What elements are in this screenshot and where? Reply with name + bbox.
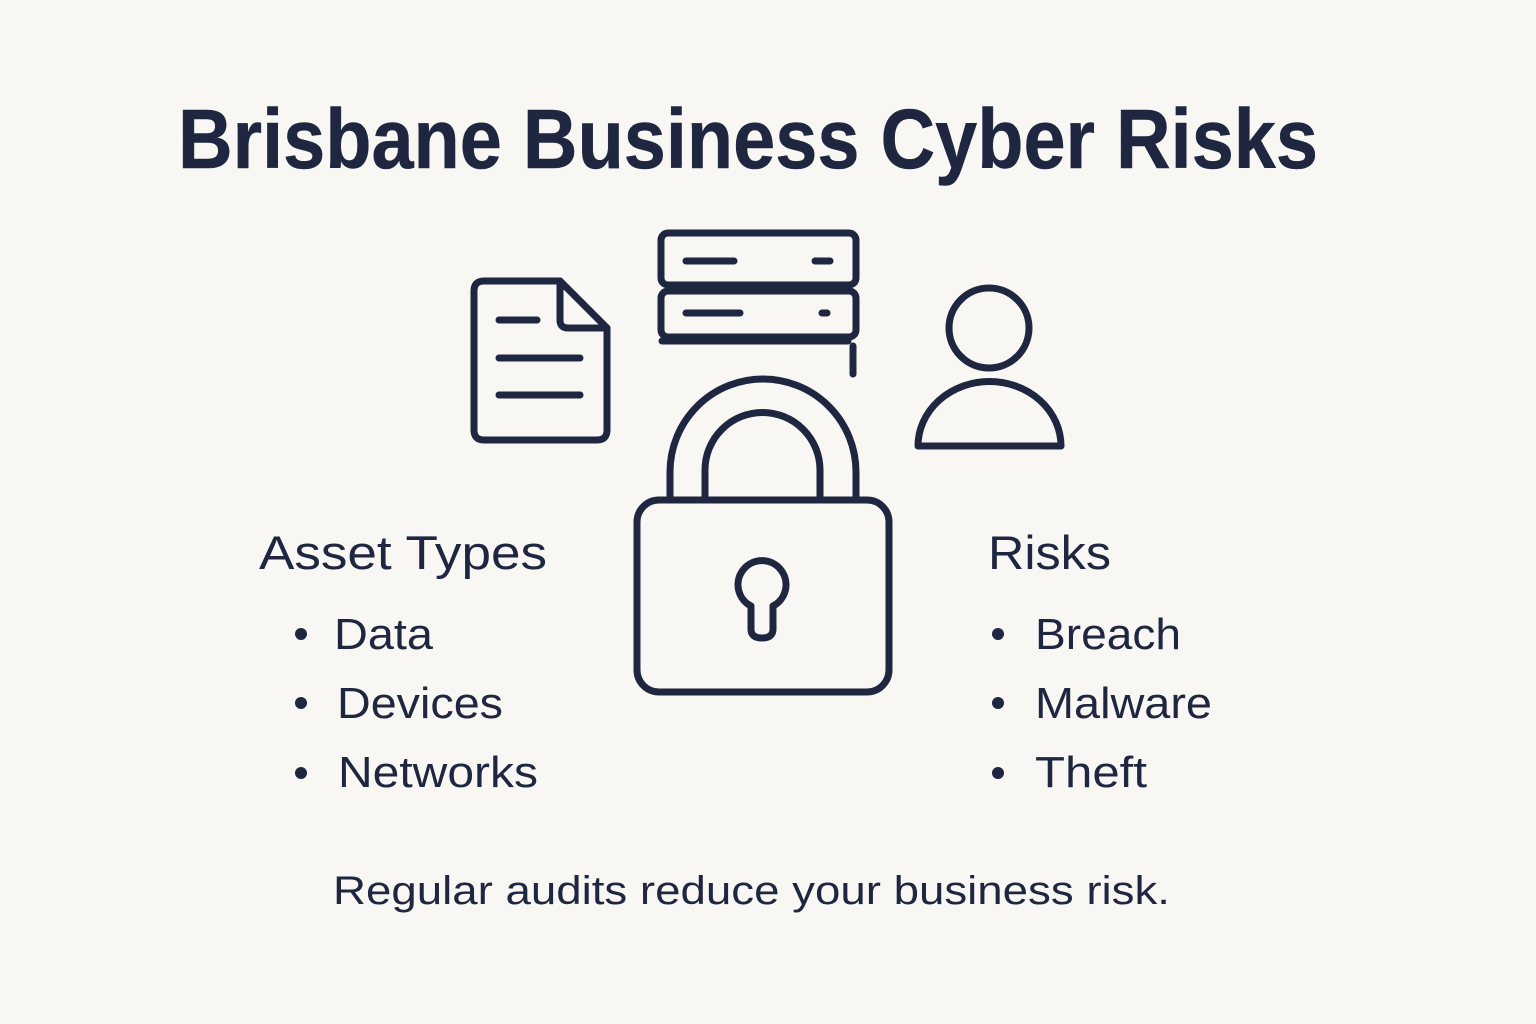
list: asset types: Data [334, 610, 434, 659]
list: asset types [295, 610, 538, 797]
heading: asset types: Asset Types [259, 526, 547, 579]
list: asset types: Devices [337, 679, 503, 728]
list: risks: Theft [1035, 748, 1147, 797]
list: risks: Malware [1035, 679, 1212, 728]
title: Brisbane Business Cyber Risks [178, 92, 1318, 186]
list: risks [992, 610, 1212, 797]
heading: risks: Risks [988, 526, 1111, 579]
footer note: Regular audits reduce your business risk. [333, 869, 1170, 913]
icon: padlock [637, 379, 889, 692]
list: asset types: Networks [338, 748, 538, 797]
icon: document [474, 281, 607, 440]
icon: person [918, 288, 1061, 446]
list: risks: Breach [1035, 610, 1181, 659]
icon: server [661, 233, 856, 374]
